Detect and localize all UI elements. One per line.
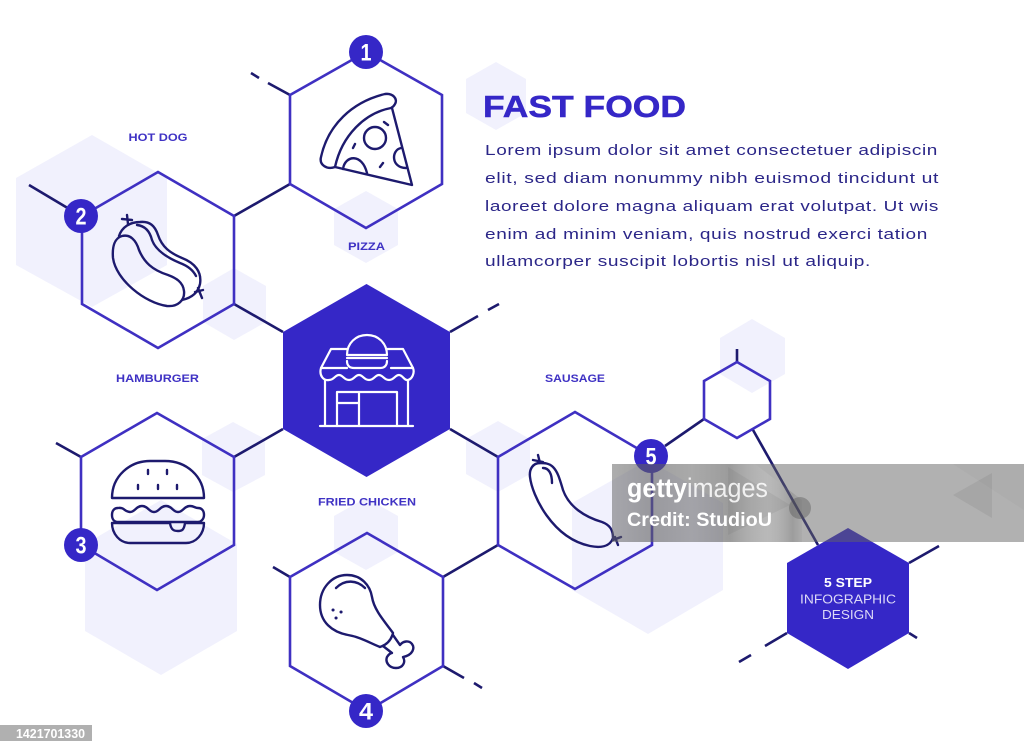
badge 5: 5 [646, 444, 656, 470]
summary hexagon: 5 step infographic design [787, 528, 909, 669]
badge 4 [349, 694, 383, 728]
label: hot dog: HOT DOG [128, 132, 188, 144]
summary filled hexagon [787, 528, 909, 669]
central hexagon: fast food shop [283, 284, 450, 477]
summary text [800, 575, 896, 622]
body text: laoreet dolore magna aliquam erat volutpat. Ut wis [485, 198, 939, 215]
body text: elit, sed diam nonummy nibh euismod tincidunt ut [485, 170, 939, 187]
icon: hot dog [113, 215, 203, 306]
icon: sausage [530, 455, 621, 547]
summary text: 5 STEP [824, 575, 872, 590]
badge 2: 2 [76, 204, 86, 230]
summary text: DESIGN [822, 607, 874, 622]
watermark credit: Credit: StudioU [627, 510, 772, 531]
watermark band [612, 464, 1024, 542]
badge 4: 4 [359, 698, 374, 726]
step 3: hamburger [81, 413, 234, 590]
step 4: fried chicken [290, 533, 443, 711]
watermark banner [612, 464, 1024, 542]
step 5: sausage [498, 412, 652, 589]
numbered badges [64, 35, 668, 728]
title: FAST FOOD [483, 89, 686, 124]
icon: hamburger [112, 461, 204, 543]
hamburger hexagon outline [81, 413, 234, 590]
badge 3 [64, 528, 98, 562]
hot dog hexagon outline [82, 172, 234, 348]
watermark texture [612, 464, 1024, 542]
item labels [116, 132, 605, 508]
body text: Lorem ipsum dolor sit amet consectetuer adipiscin [485, 142, 938, 159]
step 1: pizza [290, 52, 442, 228]
badge 5 [634, 439, 668, 473]
image id tag [0, 725, 92, 741]
body text: enim ad minim veniam, quis nostrud exerci tation [485, 226, 928, 243]
label: sausage: SAUSAGE [545, 373, 605, 385]
label: pizza: PIZZA [348, 241, 385, 253]
central filled hexagon [283, 284, 450, 477]
badge 1 [349, 35, 383, 69]
pale background hexagons [16, 62, 785, 675]
icon: chicken drumstick [320, 575, 413, 668]
badge 1: 1 [360, 40, 372, 66]
badge 2 [64, 199, 98, 233]
connector lines [29, 73, 939, 688]
step 2: hot dog [82, 172, 234, 348]
pizza hexagon outline [290, 52, 442, 228]
badge 3: 3 [76, 532, 86, 560]
icon: pizza slice [321, 94, 412, 185]
body text: ullamcorper suscipit lobortis nisl ut aliquip. [485, 253, 871, 270]
small connector hexagon [704, 362, 770, 438]
sausage hexagon outline [498, 412, 652, 589]
watermark logotype: gettyimages [627, 473, 768, 503]
tag number: 1421701330 [16, 727, 85, 741]
icon: burger shop [320, 335, 414, 426]
tag background [0, 725, 92, 741]
label: fried chicken: FRIED CHICKEN [318, 496, 416, 508]
fried chicken hexagon outline [290, 533, 443, 711]
summary text: INFOGRAPHIC [800, 592, 896, 606]
label: hamburger: HAMBURGER [116, 373, 199, 385]
body text [485, 142, 939, 270]
